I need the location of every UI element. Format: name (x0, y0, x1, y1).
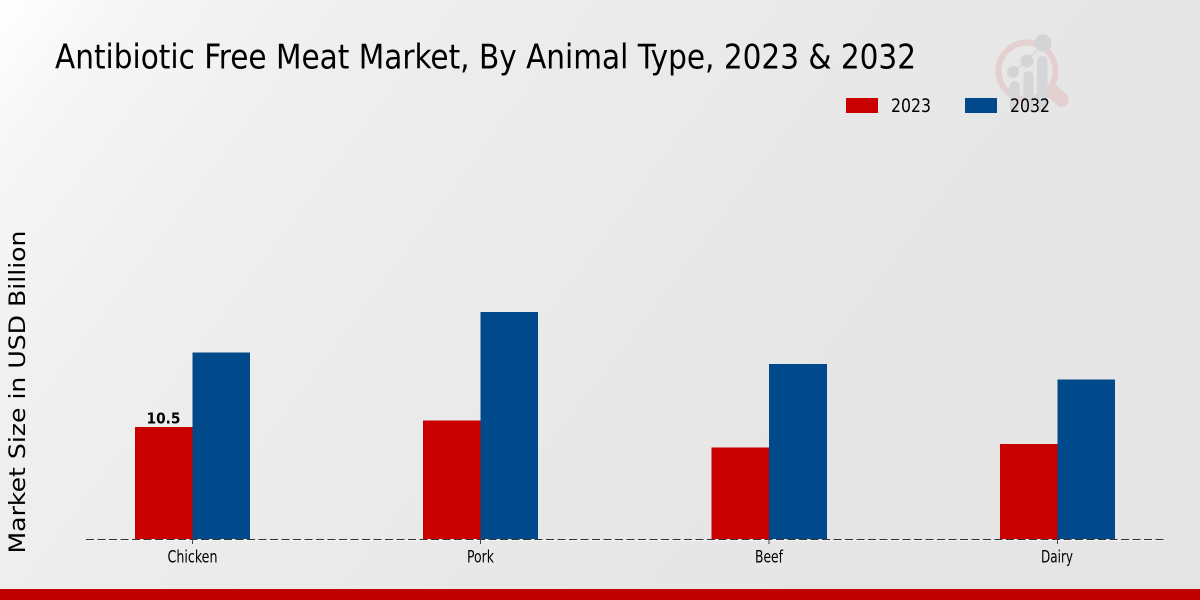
bars: Beef (712, 364, 827, 539)
bars: Pork (423, 312, 538, 539)
x axis category labels: Dairy (1041, 548, 1073, 566)
value label: 10.5: 10.5 (146, 410, 180, 428)
x axis category labels: Chicken (168, 548, 218, 566)
footer bar (0, 589, 1200, 600)
icon: magnifier watermark logo (998, 34, 1062, 112)
legend: 2023 (846, 95, 931, 117)
x axis category labels: Beef (755, 548, 784, 566)
legend: 2032: 2032 (1010, 95, 1050, 117)
x axis baseline (86, 539, 1164, 544)
title: Antibiotic Free Meat Market, By Animal Type, 2023 & 2032 (55, 38, 916, 76)
legend: 2023: 2023 (891, 95, 931, 117)
bars: Dairy (1000, 380, 1115, 539)
legend: 2032 (965, 95, 1050, 117)
bar chart (86, 312, 1164, 566)
legend (846, 95, 1050, 117)
x axis category labels (168, 548, 1073, 566)
y axis label: Market Size in USD Billion (5, 230, 31, 554)
bars: Chicken (135, 352, 250, 539)
x axis category labels: Pork (467, 548, 494, 566)
